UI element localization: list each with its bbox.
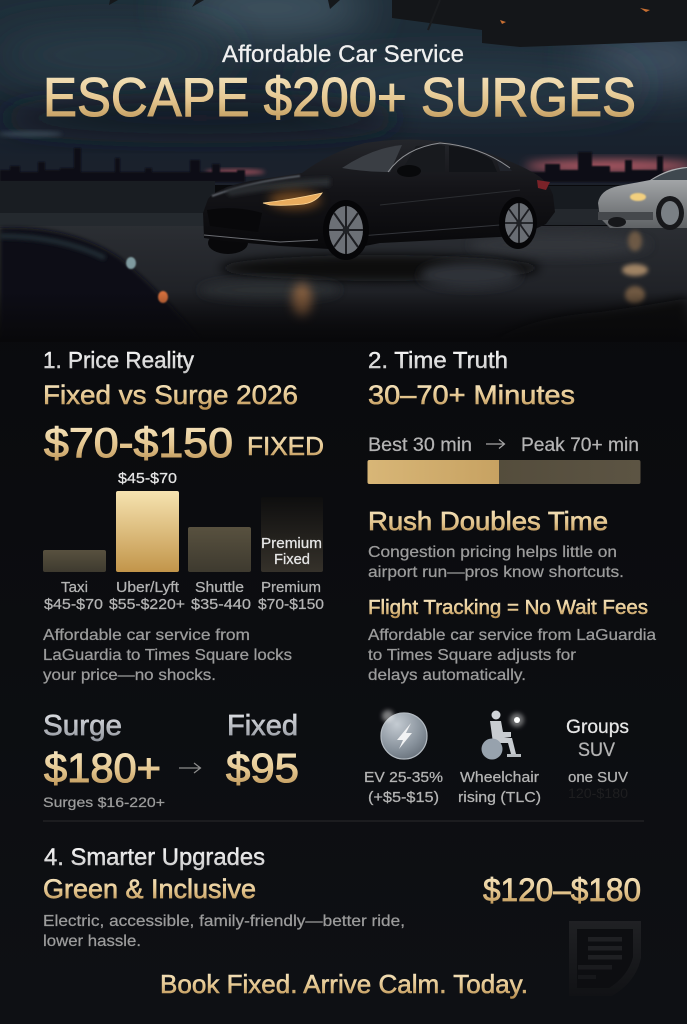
hood highlight bbox=[212, 176, 300, 196]
axis label: premium: Premium bbox=[261, 579, 321, 596]
price: surge: $180+ bbox=[44, 745, 161, 791]
panel: surge vs fixed comparison bbox=[43, 710, 299, 810]
price: upgrades: $120–$180 bbox=[483, 872, 641, 908]
bar: shuttle bbox=[188, 527, 251, 572]
icon: wheelchair user bbox=[482, 710, 524, 760]
groups SUV label bbox=[566, 717, 629, 761]
sunset glow on the horizon bbox=[525, 160, 687, 172]
headline block bbox=[43, 41, 636, 128]
blurred foreground car at left bbox=[0, 226, 172, 310]
axis label: shuttle: $35-440 bbox=[191, 596, 251, 613]
time progress bar bbox=[368, 460, 640, 484]
icon: EV lightning badge bbox=[380, 710, 428, 760]
price: fixed: $95 bbox=[226, 745, 299, 791]
panel: time truth bbox=[368, 347, 656, 684]
bar text: premium fixed: Premium bbox=[261, 536, 322, 552]
subtitle: Affordable Car Service bbox=[222, 41, 464, 68]
caption: EV: EV 25-35% bbox=[364, 769, 443, 786]
wet tarmac bbox=[0, 226, 687, 316]
body text: upgrades: Electric, accessible, family-friendly—better ride, bbox=[43, 913, 405, 930]
bar text: premium fixed: Fixed bbox=[274, 552, 310, 568]
axis label: shuttle: Shuttle bbox=[195, 579, 244, 596]
bar: uber lyft bbox=[116, 491, 179, 572]
heading: price reality: 1. Price Reality bbox=[43, 347, 194, 373]
subheading: minutes: 30–70+ Minutes bbox=[368, 380, 575, 410]
subheading: flight tracking: Flight Tracking = No Wait Fees bbox=[368, 597, 648, 619]
arrow bbox=[486, 440, 504, 448]
label: peak time: Peak 70+ min bbox=[521, 435, 639, 456]
headlight bbox=[269, 191, 321, 209]
axis label: taxi: Taxi bbox=[61, 579, 88, 596]
main title: ESCAPE $200+ SURGES bbox=[43, 66, 636, 128]
caption: wheelchair: Wheelchair bbox=[460, 769, 539, 786]
panel: price reality bbox=[43, 347, 324, 684]
body text: upgrades: lower hassle. bbox=[43, 933, 141, 950]
concrete barrier wall bbox=[0, 181, 215, 213]
panel: upgrade icons bbox=[364, 710, 629, 806]
body text: delays: to Times Square adjusts for bbox=[368, 647, 577, 664]
body text: congestion: airport run—pros know shortcuts. bbox=[368, 564, 624, 581]
subheading: rush doubles time: Rush Doubles Time bbox=[368, 506, 608, 536]
body text: upgrades bbox=[43, 913, 405, 950]
blurred foreground shape at right bbox=[583, 296, 687, 316]
caption: wheelchair: rising (TLC) bbox=[458, 789, 541, 806]
body text: price lock: Affordable car service from bbox=[43, 627, 250, 644]
silver car at right bbox=[598, 167, 687, 230]
label: fixed: Fixed bbox=[227, 710, 298, 742]
heading: smarter upgrades: 4. Smarter Upgrades bbox=[44, 844, 265, 871]
label: best time: Best 30 min bbox=[368, 435, 472, 456]
rear wheel bbox=[499, 197, 537, 249]
groups SUV label: SUV bbox=[578, 740, 615, 761]
axis label: shuttle bbox=[191, 579, 251, 613]
caption: wheelchair bbox=[458, 769, 541, 806]
dark overhead terminal canopy bbox=[109, 0, 687, 47]
caption: EV: (+$5-$15) bbox=[368, 789, 439, 806]
big price range: $70-$150 bbox=[44, 419, 233, 466]
axis label: uber lyft: $55-$220+ bbox=[109, 596, 185, 613]
distant skyline bbox=[0, 148, 687, 182]
windows bbox=[342, 145, 402, 172]
bar chart: fares by service bbox=[43, 470, 324, 613]
body text: delays bbox=[368, 627, 656, 684]
heading: time truth: 2. Time Truth bbox=[368, 347, 508, 373]
groups SUV label: Groups bbox=[566, 717, 629, 738]
caption: groups bbox=[568, 769, 628, 801]
front wheel bbox=[323, 200, 369, 260]
axis label: taxi bbox=[44, 579, 103, 613]
side mirror bbox=[397, 165, 421, 177]
axis label: uber lyft bbox=[109, 579, 185, 613]
bar value label: $45-$70 bbox=[118, 470, 177, 487]
bar: taxi bbox=[43, 550, 106, 572]
main black sedan bbox=[203, 140, 555, 260]
body text: delays: Affordable car service from LaGuardia bbox=[368, 627, 656, 644]
axis label: premium bbox=[258, 579, 324, 613]
axis label: premium: $70-$150 bbox=[258, 596, 324, 613]
subheading: green and inclusive: Green & Inclusive bbox=[43, 874, 256, 904]
panel: smarter upgrades bbox=[43, 844, 641, 996]
body text: congestion: Congestion pricing helps little on bbox=[368, 544, 617, 561]
label: surge: Surge bbox=[43, 710, 122, 742]
bar: premium bbox=[261, 497, 323, 572]
call to action: Book Fixed. Arrive Calm. Today. bbox=[160, 969, 528, 999]
body text: congestion bbox=[368, 544, 624, 581]
tail light bbox=[537, 180, 550, 190]
caption: groups: 120-$180 bbox=[568, 785, 628, 801]
body text: price lock: LaGuardia to Times Square locks bbox=[43, 647, 292, 664]
arrow bbox=[179, 763, 200, 773]
body text: delays: delays automatically. bbox=[368, 667, 526, 684]
caption: EV bbox=[364, 769, 443, 806]
note: surge range: Surges $16-220+ bbox=[43, 794, 165, 810]
body text: price lock bbox=[43, 627, 292, 684]
body text: price lock: your price—no shocks. bbox=[43, 667, 216, 684]
grille bbox=[207, 208, 262, 216]
axis label: uber lyft: Uber/Lyft bbox=[116, 579, 180, 596]
hero photo: car on wet tarmac under storm sky bbox=[0, 0, 687, 345]
subheading: fixed vs surge: Fixed vs Surge 2026 bbox=[43, 380, 298, 410]
axis label: taxi: $45-$70 bbox=[44, 596, 103, 613]
icon: faded document bbox=[569, 921, 641, 996]
fixed tag: FIXED bbox=[247, 431, 324, 461]
bar text: premium fixed bbox=[261, 536, 322, 568]
caption: groups: one SUV bbox=[568, 769, 628, 786]
